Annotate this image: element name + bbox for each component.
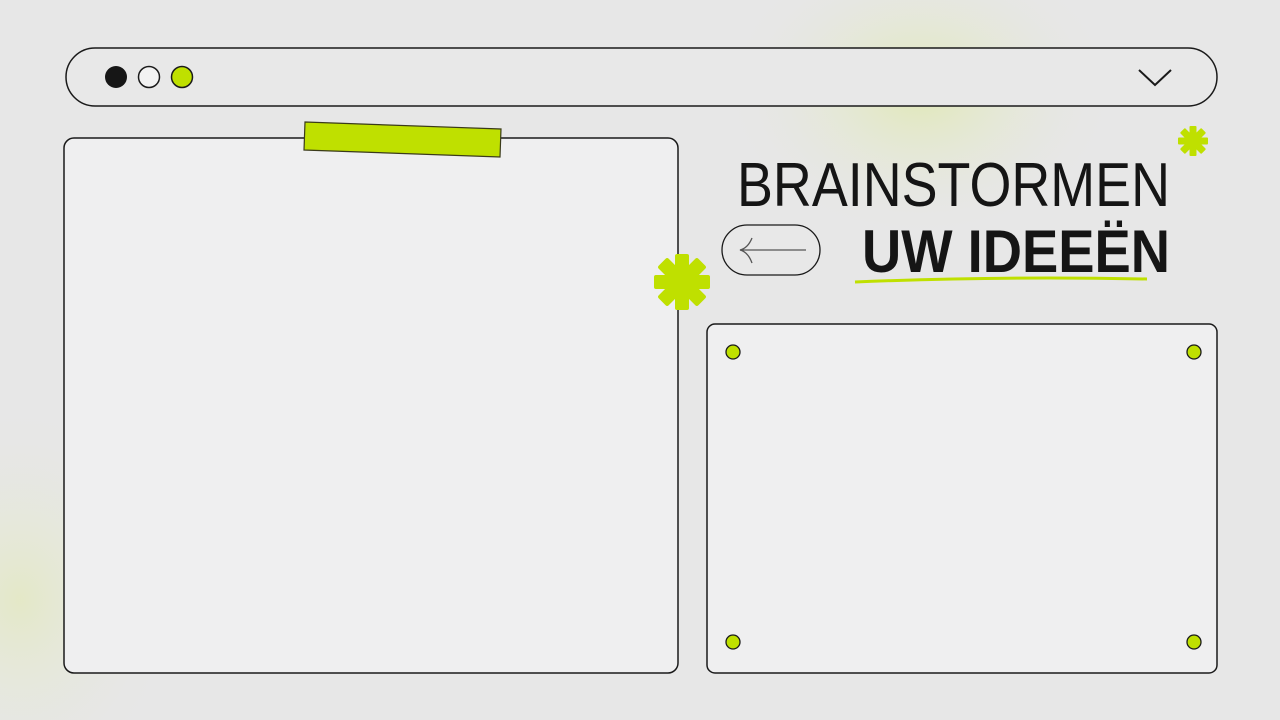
panel: right board	[707, 324, 1217, 673]
title	[737, 151, 1170, 285]
icon: chevron	[1139, 70, 1171, 85]
title: BRAINSTORMEN	[737, 151, 1170, 220]
window dots	[105, 66, 192, 88]
title: UW IDEEËN	[862, 218, 1170, 285]
pins	[726, 345, 1201, 649]
icon: large asterisk	[654, 254, 710, 310]
highlight underline	[855, 278, 1147, 282]
icon: small asterisk	[1178, 126, 1208, 156]
tape	[304, 122, 501, 157]
panel: left board	[64, 122, 678, 673]
arrow button	[722, 225, 820, 275]
browser bar	[66, 48, 1217, 106]
